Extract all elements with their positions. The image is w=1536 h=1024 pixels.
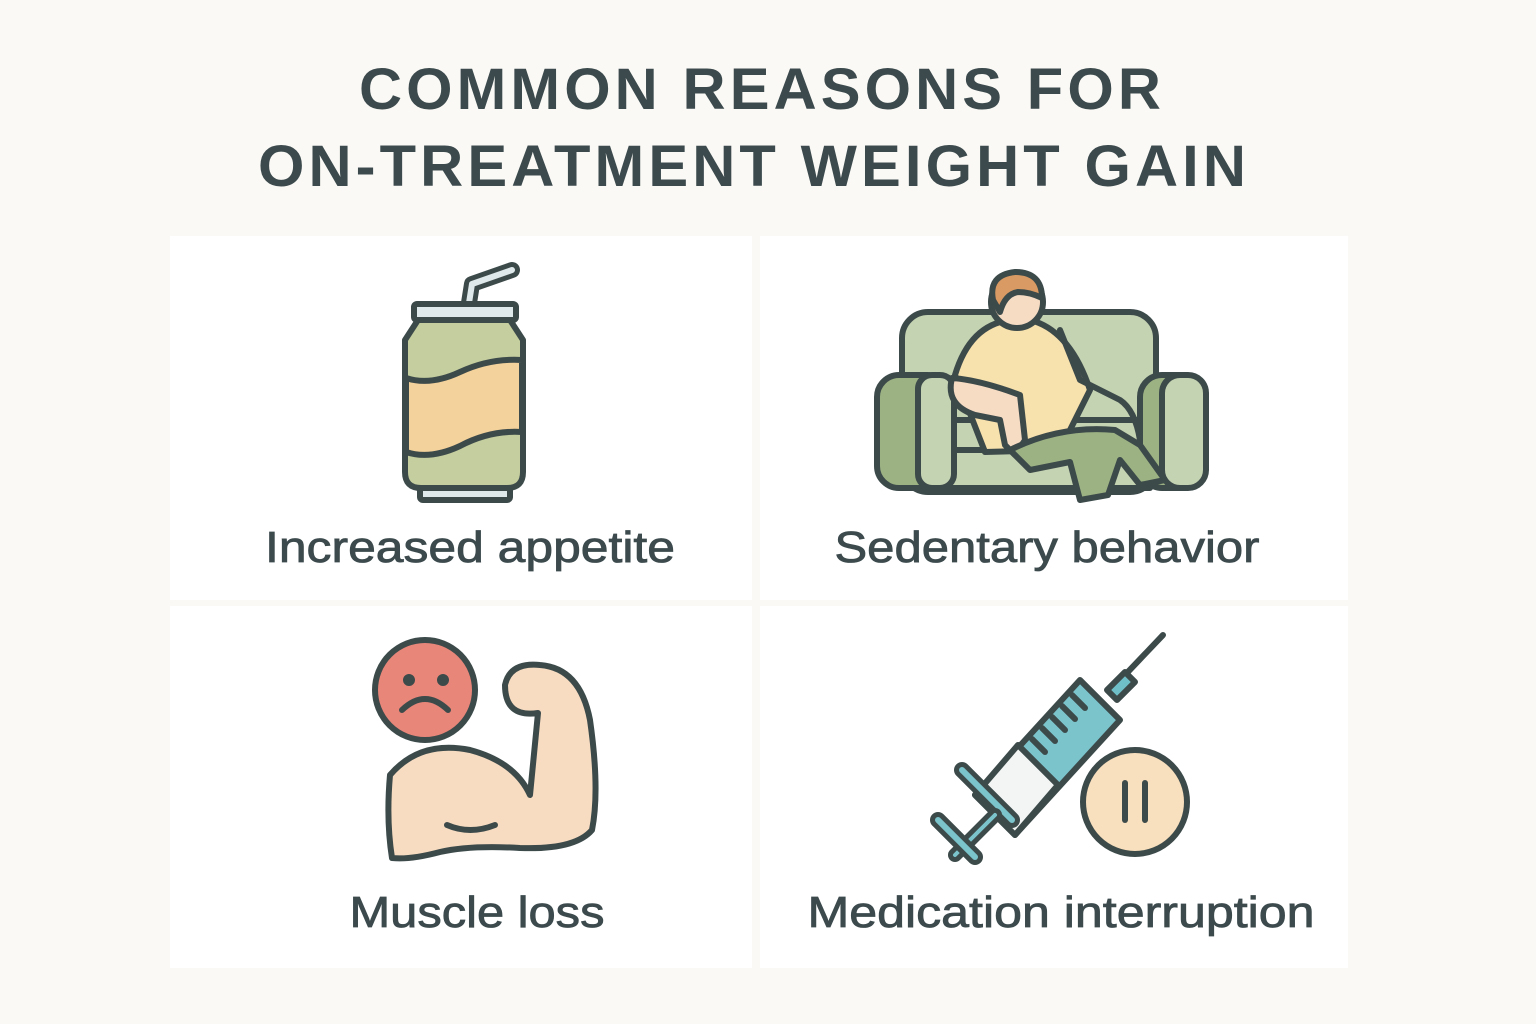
icon: pause pill — [1083, 750, 1187, 854]
icon: soda can — [405, 270, 523, 500]
label: medication interruption: Medication interruption — [808, 888, 1314, 937]
icon: flexed arm — [388, 665, 596, 858]
label: increased appetite: Increased appetite — [265, 523, 675, 572]
title: ON-TREATMENT WEIGHT GAIN — [258, 134, 1250, 199]
icon: sad face — [375, 640, 475, 740]
panel: medication interruption — [760, 606, 1348, 968]
icon: person on sofa — [877, 272, 1206, 500]
icon: syringe — [938, 635, 1163, 857]
panel: increased appetite — [170, 236, 752, 600]
panel: muscle loss — [170, 606, 752, 968]
title — [258, 57, 1250, 199]
panel: sedentary behavior — [760, 236, 1348, 600]
label: sedentary behavior: Sedentary behavior — [834, 523, 1260, 572]
title: COMMON REASONS FOR — [359, 57, 1165, 122]
label: muscle loss: Muscle loss — [350, 888, 604, 937]
